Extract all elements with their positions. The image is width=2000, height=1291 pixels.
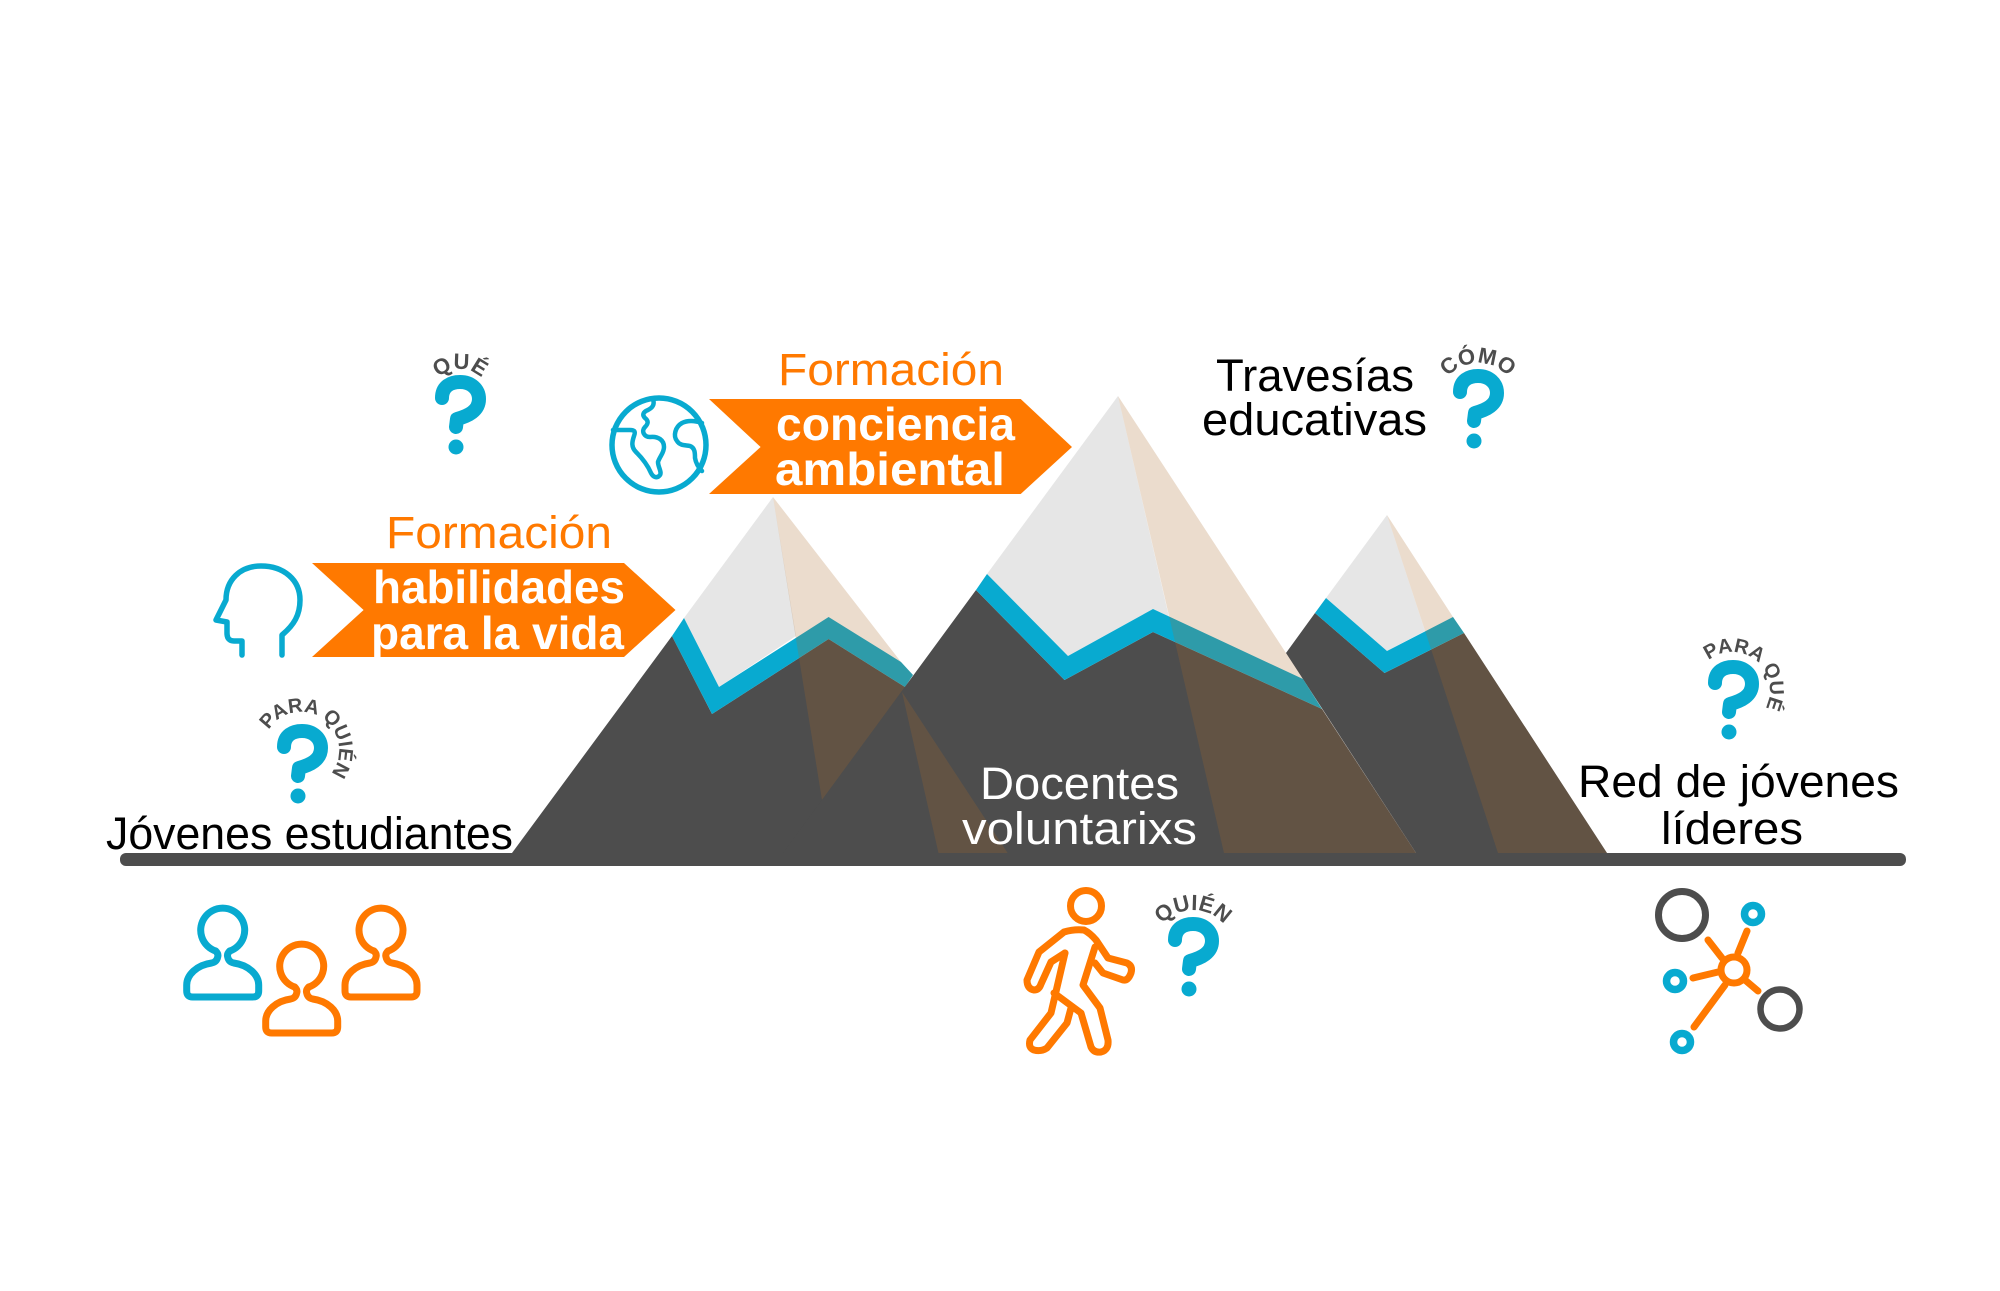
question icon: QUÉ: QUÉ [434, 354, 490, 377]
icon: students [187, 908, 417, 1033]
centre mountain [783, 396, 1416, 853]
mountain range illustration [512, 396, 1607, 853]
icon: walking person [1027, 890, 1132, 1052]
label: Red de jóvenes líderes: Red de jóvenes [1578, 756, 1899, 807]
icon: network [1658, 892, 1800, 1050]
arrow: habilidades para la vida [312, 561, 676, 659]
right mountain [1286, 515, 1607, 853]
label: Travesías educativas [1202, 350, 1427, 445]
question icon: PARA QUÉ [1702, 638, 1785, 740]
label: Travesías educativas: educativas [1202, 394, 1427, 445]
arrow: conciencia ambiental: ambiental [775, 443, 1005, 495]
student blue [187, 908, 259, 997]
ground line [120, 853, 1906, 866]
heading: Formación (conciencia): Formación [778, 344, 1004, 395]
label: Travesías educativas: Travesías [1216, 350, 1414, 401]
left mountain [512, 497, 960, 853]
heading: Formación (habilidades): Formación [386, 507, 612, 558]
question icon: PARA QUIÉN: PARA QUIÉN [258, 698, 356, 779]
icon: globe [612, 398, 706, 492]
student orange centre [266, 944, 338, 1033]
question icon: CÓMO: CÓMO [1441, 344, 1515, 374]
label: Docentes voluntarixs [962, 758, 1197, 854]
arrow: habilidades para la vida: para la vida [371, 607, 624, 659]
icon: head [216, 566, 300, 655]
question icon: CÓMO [1441, 344, 1515, 448]
label: Jóvenes estudiantes: Jóvenes estudiantes [106, 808, 513, 859]
student orange right [345, 908, 417, 997]
arrow: conciencia ambiental: conciencia [776, 398, 1015, 450]
question icon: PARA QUÉ: PARA QUÉ [1702, 638, 1785, 712]
question icon: QUÉ [434, 354, 490, 454]
arrow: conciencia ambiental [709, 398, 1072, 495]
label: Red de jóvenes líderes: líderes [1661, 803, 1803, 854]
label: Red de jóvenes líderes [1578, 756, 1899, 854]
question icon: QUIÉN: QUIÉN [1156, 893, 1232, 923]
question icon: QUIÉN [1156, 893, 1232, 996]
arrow: habilidades para la vida: habilidades [373, 561, 625, 613]
label: Docentes voluntarixs: voluntarixs [962, 803, 1197, 854]
label: Docentes voluntarixs: Docentes [980, 758, 1179, 809]
